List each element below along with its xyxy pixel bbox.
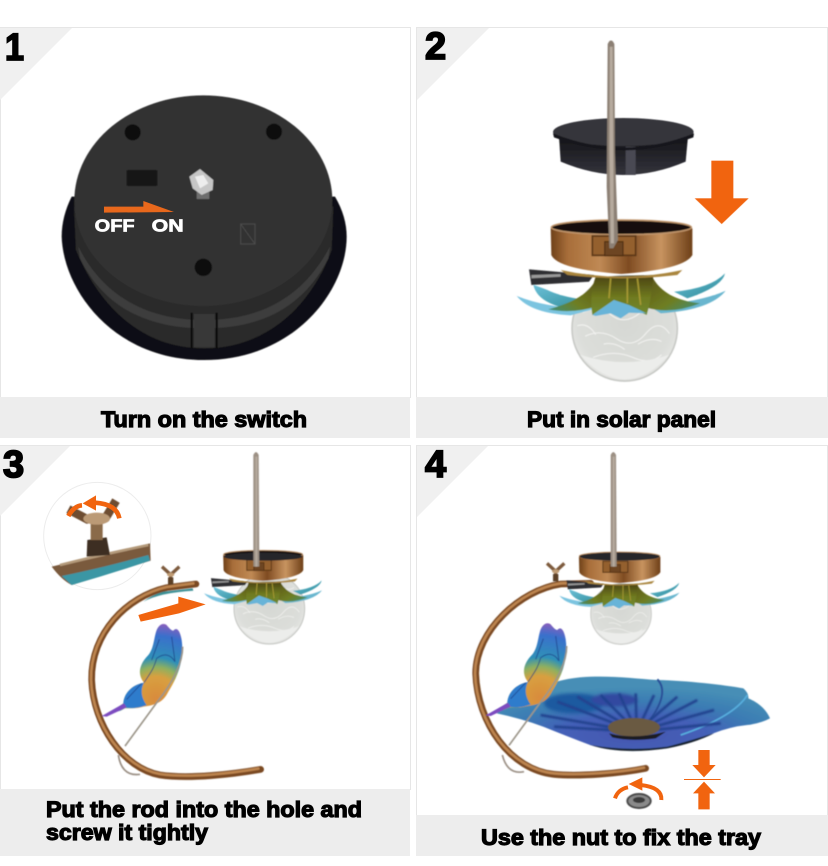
panel 4: use the nut to fix the tray — [416, 444, 828, 856]
arrows: press tray and nut together — [684, 750, 721, 809]
step number 4: 4 — [425, 444, 446, 486]
caption 3: Put the rod into the hole and — [46, 797, 362, 822]
photo: lamp with solar panel above — [517, 40, 749, 381]
tray — [497, 677, 770, 751]
caption 3 — [46, 797, 362, 845]
step number 3: 3 — [3, 444, 24, 486]
stand arc — [475, 583, 646, 775]
stand arc — [91, 583, 261, 777]
corner tab 2 — [417, 28, 489, 100]
caption 2: Put in solar panel — [527, 407, 716, 432]
step number 2: 2 — [425, 26, 446, 68]
corner tab 4 — [417, 446, 488, 517]
photo: stand, butterfly and lamp — [44, 452, 322, 777]
caption 4: Use the nut to fix the tray — [481, 825, 762, 850]
corner tab 1 — [0, 28, 72, 100]
arrow: down — [695, 161, 749, 224]
caption 1: Turn on the switch — [101, 407, 307, 432]
switch labels: ON — [152, 215, 184, 235]
photo: assembled bird bath — [475, 452, 770, 809]
switch labels: OFF — [95, 215, 135, 235]
panel 2: put in solar panel — [416, 26, 828, 438]
nut — [627, 794, 651, 808]
arrow: off to on — [104, 201, 174, 213]
lamp — [204, 452, 322, 644]
arrow: turn nut — [615, 777, 661, 800]
caption 3: screw it tightly — [46, 820, 209, 845]
caption band 1 — [0, 397, 410, 438]
caption band 2 — [416, 397, 828, 438]
step number 1: 1 — [5, 27, 24, 69]
corner tab 3 — [0, 446, 70, 516]
switch labels — [95, 215, 184, 235]
inset circle: wing nut detail — [44, 482, 151, 590]
lamp — [559, 452, 680, 644]
caption band 4 — [416, 815, 828, 856]
arrow: into hole — [138, 597, 206, 622]
panel 3: put the rod into the hole — [0, 444, 410, 856]
caption band 3 — [0, 789, 410, 856]
photo: solar unit underside — [62, 95, 347, 360]
panel 1: turn on the switch — [0, 27, 410, 438]
